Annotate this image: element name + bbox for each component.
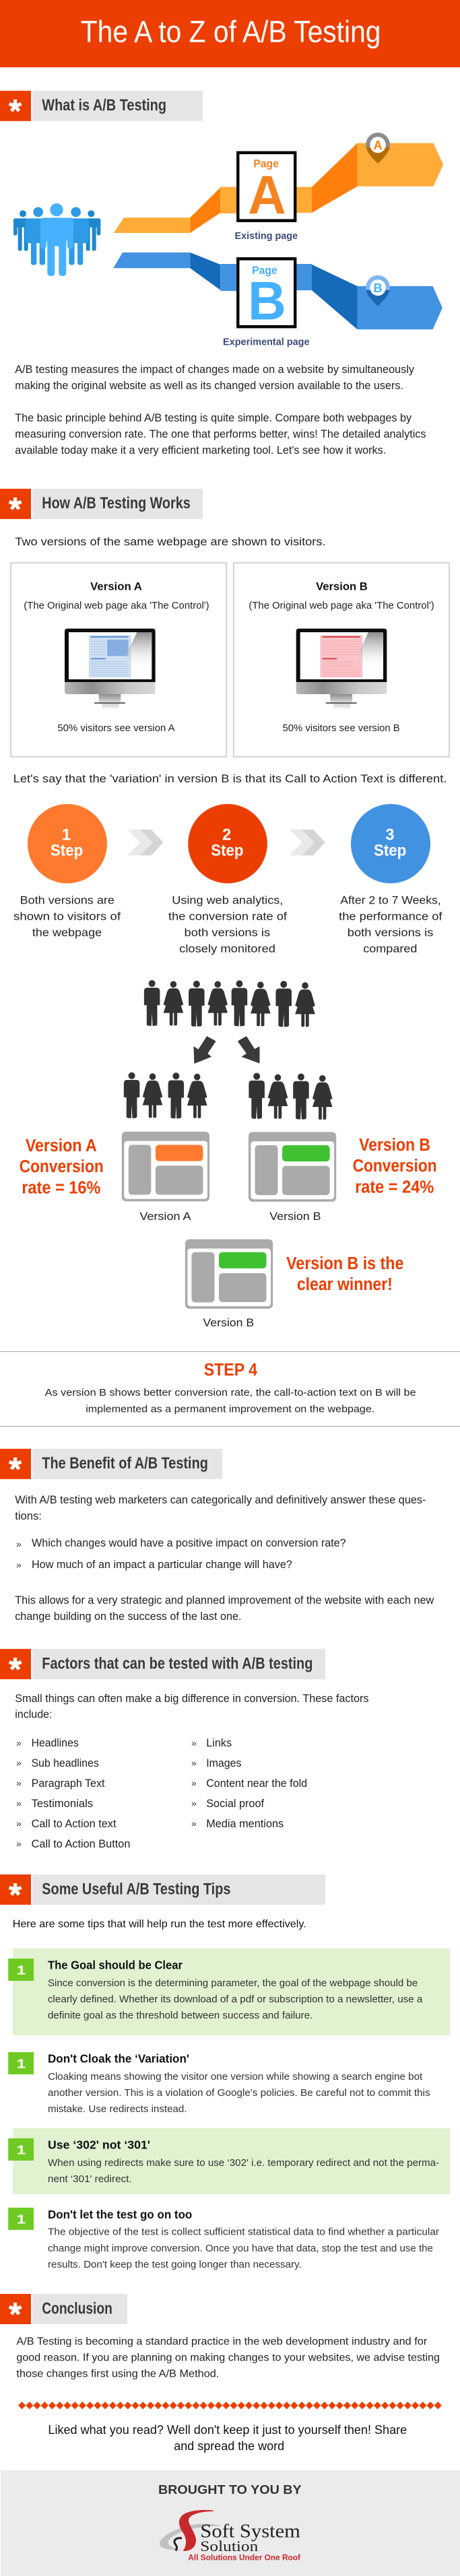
step 1: 1 (62, 825, 71, 844)
tip 1: goal: The Goal should be Clear (48, 1959, 183, 1972)
text: brought to you by: BROUGHT TO YOU BY (158, 2482, 302, 2497)
text: two versions intro: Two versions of the same webpage are shown to visitors. (15, 536, 326, 548)
tip 4: test length: 1 (17, 2212, 26, 2227)
list: factors right column: » (191, 1798, 197, 1808)
logo: Soft System Solution (160, 2510, 300, 2563)
list: factors left column: Call to Action text (32, 1818, 117, 1830)
step 1 (13, 804, 121, 939)
step 3: Step (374, 842, 406, 860)
diagram: page B path: Page (252, 264, 277, 277)
step 4 block (45, 1361, 416, 1415)
tip 3: 302 not 301: 1 (17, 2142, 26, 2157)
arrow: split to version B (238, 1036, 260, 1063)
list: factors left column: » (16, 1778, 22, 1788)
title banner: The A to Z of A/B Testing (81, 14, 381, 49)
step 4 block: As version B shows better conversion rate, the call-to-action text on B will be (45, 1387, 416, 1398)
heading: Factors that can be tested (0, 1649, 325, 1679)
panel: version A: (The Original web page aka 'The Control') (24, 600, 209, 611)
text: intro paragraphs (15, 364, 426, 456)
callout: version B conversion rate: Conversion (353, 1157, 437, 1176)
step 2: Step (211, 842, 244, 860)
list: factors left column: » (16, 1798, 22, 1808)
text: factors intro (15, 1693, 369, 1721)
step 1: Both versions are (20, 894, 114, 906)
title banner (0, 0, 460, 67)
icon: map pin A (366, 133, 390, 164)
mockup: version B page (249, 1132, 336, 1223)
diagram: page A path: Page (253, 157, 279, 170)
list: factors left column: Paragraph Text (32, 1777, 105, 1790)
icon: version A visitors (124, 1073, 207, 1118)
arrow: split to version A (193, 1036, 216, 1064)
callout: clear winner: clear winner! (297, 1275, 393, 1294)
list: factors right column: » (191, 1819, 197, 1829)
step 3: the performance of (339, 910, 442, 923)
text: benefit paragraphs and questions: tions: (15, 1510, 42, 1522)
list: factors left column (16, 1737, 130, 1850)
text: conclusion paragraph: those changes first using the A/B Method. (16, 2368, 219, 2379)
tip 1: goal (8, 1948, 450, 2035)
diagram: page B path (113, 252, 442, 348)
text: intro paragraphs: making the original website as well as its changed version available to the users. (15, 380, 403, 392)
icon: version B visitors (249, 1073, 333, 1120)
tip 3: 302 not 301: nent ‘301' redirect. (48, 2173, 132, 2184)
icon: map pin B (366, 275, 390, 306)
text: benefit paragraphs and questions: With A/B testing web marketers can categorically and definitively answer these ques- (15, 1494, 426, 1506)
callout: version B conversion rate: rate = 24% (355, 1178, 434, 1196)
step 1: the webpage (32, 926, 102, 939)
icon: map pin A: A (373, 138, 383, 152)
panel: version B: (The Original web page aka 'The Control') (249, 600, 434, 611)
step 1: shown to visitors of (13, 910, 121, 923)
text: last lines of steps 2 and 3: compared (363, 943, 417, 955)
text: share call to action (48, 2422, 407, 2453)
callout: version B conversion rate (353, 1136, 437, 1196)
text: share call to action: and spread the word (174, 2439, 284, 2453)
step 3: both versions is (348, 926, 433, 939)
text: benefit paragraphs and questions: This allows for a very strategic and planned improvement of the website with each new (15, 1594, 434, 1606)
heading: Conclusion (0, 2294, 127, 2324)
list: factors left column: » (16, 1738, 22, 1748)
tip 4: test length (8, 2208, 439, 2270)
list: factors left column: Call to Action Button (32, 1838, 130, 1850)
list: factors right column: » (191, 1778, 197, 1788)
diagram: page A path: A (248, 164, 286, 225)
text: benefit paragraphs and questions: change building on the success of the last one. (15, 1611, 241, 1623)
icon: all visitors (144, 980, 315, 1027)
tip 4: test length: Don't let the test go on too (48, 2208, 192, 2221)
step 3: After 2 to 7 Weeks, (340, 894, 441, 906)
text: intro paragraphs: available today make it a very efficient marketing tool. Let's see how it works. (15, 444, 386, 456)
callout: clear winner: Version B is the (286, 1254, 403, 1273)
heading: The Benefit of A/B Testing: The Benefit of A/B Testing (42, 1454, 208, 1472)
diagram: page A path (114, 133, 443, 242)
tip 4: test length: results. Don't keep the test going longer than necessary. (48, 2258, 302, 2270)
heading: Factors that can be tested: Factors that can be tested with A/B testing (42, 1654, 313, 1672)
text: benefit paragraphs and questions: » (16, 1560, 22, 1570)
callout: version A conversion rate (20, 1137, 104, 1197)
panel: version A: Version A (90, 580, 142, 592)
step 2 (168, 804, 288, 939)
tip 3: 302 not 301 (8, 2128, 450, 2194)
list: factors left column: » (16, 1839, 22, 1849)
text: intro paragraphs: A/B testing measures the impact of changes made on a website by simultaneously (15, 364, 415, 376)
text: benefit paragraphs and questions: Which changes would have a positive impact on conversion rate? (32, 1537, 346, 1549)
list: factors right column: Links (206, 1737, 232, 1749)
text: last lines of steps 2 and 3 (179, 943, 417, 955)
mockup: version B page: Version B (269, 1211, 321, 1223)
tip 2: cloak: mistake. Use redirects instead. (48, 2103, 187, 2114)
text: intro paragraphs: measuring conversion rate. The one that performs better, wins! The detailed analytics (15, 428, 426, 440)
panel: version B (234, 563, 449, 757)
callout: version A conversion rate: rate = 16% (22, 1178, 101, 1197)
arrow: step 1 to 2 (127, 829, 164, 855)
tip 2: cloak (8, 2052, 430, 2114)
text: intro paragraphs: The basic principle behind A/B testing is quite simple. Compare both webpages by (15, 412, 412, 424)
list: factors right column: » (191, 1738, 197, 1748)
text: last lines of steps 2 and 3: closely monitored (179, 943, 275, 955)
text: variation statement: Let's say that the 'variation' in version B is that its Call to Action Text is different. (13, 773, 447, 785)
step 3: 3 (385, 825, 394, 844)
icon: map pin B: B (373, 281, 383, 295)
diagram: page B path: B (248, 271, 286, 331)
list: factors right column: Content near the fold (206, 1777, 307, 1790)
mockup: winning version B page: Version B (203, 1317, 254, 1329)
panel: version A: 50% visitors see version A (57, 722, 175, 734)
step 2: Using web analytics, (172, 894, 283, 906)
step 4 block: implemented as a permanent improvement on the webpage. (86, 1403, 374, 1415)
step 2: the conversion rate of (168, 910, 288, 923)
text: benefit paragraphs and questions: » (16, 1539, 22, 1549)
diagram: page A path: Existing page (234, 231, 298, 242)
text: conclusion paragraph (16, 2336, 440, 2379)
step 1: Step (51, 842, 83, 860)
text: benefit paragraphs and questions (15, 1494, 434, 1623)
tip 3: 302 not 301: Use ‘302' not ‘301' (48, 2138, 150, 2152)
heading: Some Useful A/B Testing Tips (0, 1874, 325, 1905)
heading: The Benefit of A/B Testing (0, 1449, 222, 1479)
list: factors right column: Social proof (206, 1798, 265, 1810)
panel: footer (1, 2470, 460, 2576)
step 2: 2 (222, 825, 231, 844)
heading: Some Useful A/B Testing Tips: Some Useful A/B Testing Tips (42, 1880, 230, 1898)
text: factors intro: Small things can often make a big difference in conversion. These factors (15, 1693, 369, 1705)
mockup: version A page (122, 1132, 209, 1223)
mockup: winning version B page (185, 1240, 273, 1329)
list: factors right column (191, 1737, 307, 1830)
mockup: version A page: Version A (139, 1211, 191, 1223)
heading: How A/B Testing Works: How A/B Testing Works (42, 494, 191, 512)
panel: version A (11, 563, 226, 757)
panel: version B: Version B (316, 580, 368, 592)
callout: clear winner (286, 1254, 403, 1294)
step 2: both versions is (185, 926, 270, 939)
icon: group of visitors (13, 203, 100, 276)
list: factors left column: Testimonials (32, 1798, 93, 1810)
logo: Soft System Solution: Soft System (200, 2521, 300, 2542)
list: factors left column: » (16, 1758, 22, 1768)
list: factors left column: Sub headlines (32, 1757, 99, 1769)
callout: version A conversion rate: Version A (26, 1137, 97, 1155)
heading: What is A/B Testing: What is A/B Testing (42, 96, 166, 114)
heading: How A/B Testing Works (0, 489, 203, 519)
icon: monitor with page A (65, 629, 156, 710)
list: factors left column: Headlines (32, 1737, 79, 1749)
logo: Soft System Solution: All Solutions Under One Roof (188, 2554, 300, 2563)
heading: Conclusion: Conclusion (42, 2299, 112, 2317)
tip 2: cloak: Don't Cloak the ‘Variation' (48, 2052, 189, 2066)
icon: monitor with page B (296, 629, 387, 710)
list: factors right column: Images (206, 1757, 241, 1769)
diagram: page B path: Experimental page (223, 337, 310, 348)
tip 2: cloak: 1 (17, 2056, 26, 2071)
step 3 (339, 804, 442, 939)
step 4 block: STEP 4 (204, 1361, 258, 1380)
arrow: step 2 to 3 (290, 829, 325, 855)
heading: What is A/B Testing (0, 91, 203, 121)
tip 1: goal: definite goal as the threshold between success and failure. (48, 2009, 313, 2021)
callout: version A conversion rate: Conversion (20, 1157, 104, 1176)
panel: version B: 50% visitors see version B (282, 722, 400, 734)
text: benefit paragraphs and questions: How much of an impact a particular change will have? (32, 1559, 292, 1571)
list: factors right column: » (191, 1758, 197, 1768)
list: factors right column: Media mentions (206, 1818, 284, 1830)
text: tips intro: Here are some tips that will help run the test more effectively. (13, 1918, 306, 1930)
list: factors left column: » (16, 1819, 22, 1829)
callout: version B conversion rate: Version B (359, 1136, 430, 1155)
logo: Soft System Solution: Solution (200, 2538, 258, 2554)
text: factors intro: include: (15, 1709, 53, 1721)
tip 1: goal: 1 (17, 1963, 26, 1977)
